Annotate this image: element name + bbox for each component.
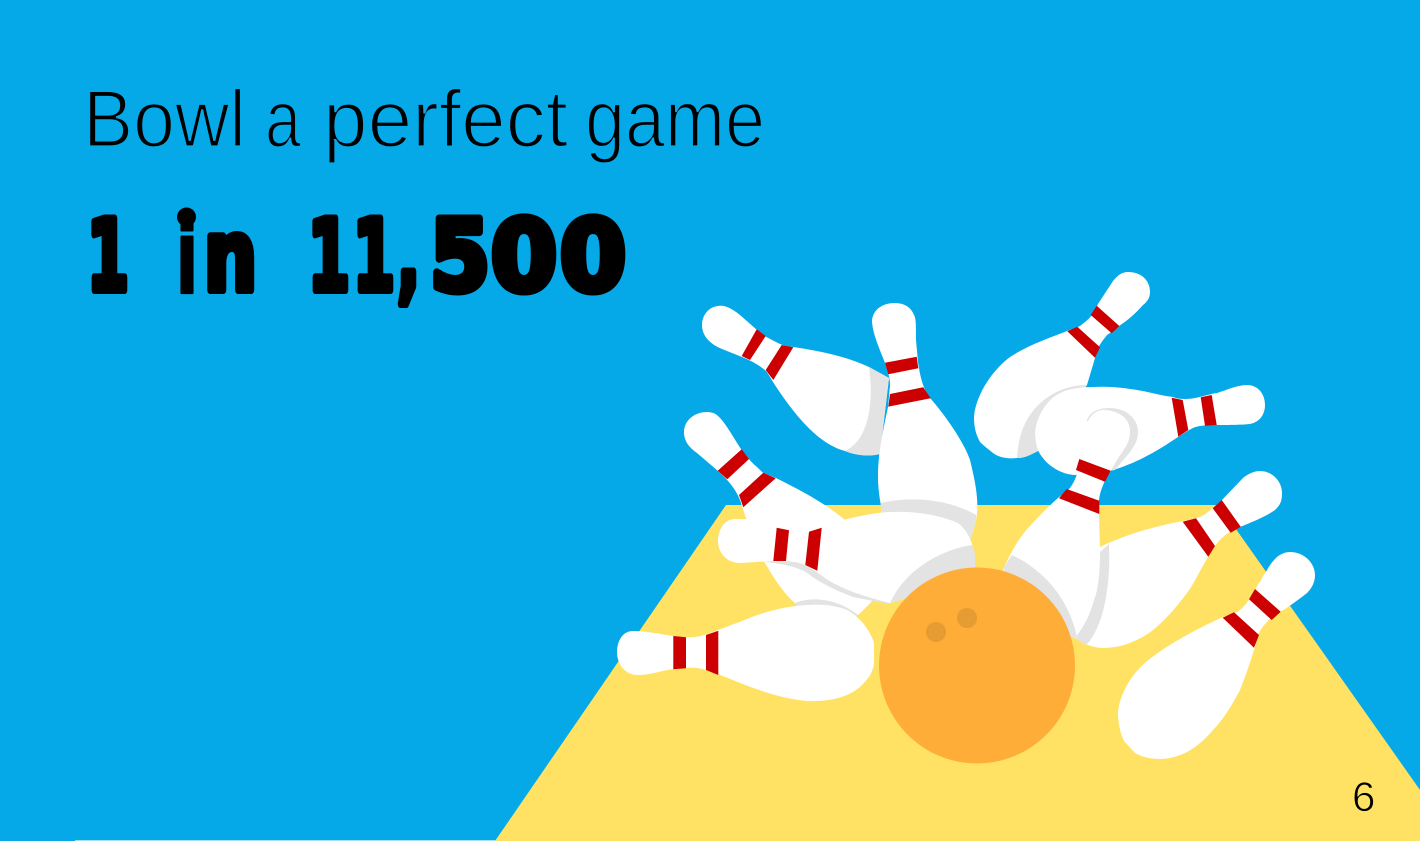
odds figure: ,	[397, 200, 420, 314]
bowling ball	[879, 568, 1075, 764]
odds figure: n	[204, 200, 257, 314]
pin: upper right, horizontal	[1035, 385, 1265, 475]
title: game	[585, 74, 765, 164]
bowling lane	[495, 505, 1420, 841]
pin: bottom left, lying flat	[617, 605, 874, 701]
page number: 6	[1352, 773, 1375, 820]
odds figure: 1	[87, 200, 129, 314]
title: Bowl	[83, 74, 246, 164]
pin: top left, knocked over	[702, 306, 889, 455]
odds figure: 0	[560, 200, 626, 314]
pin: middle left, behind horizontal pin	[684, 412, 890, 622]
odds figure: 1	[353, 200, 395, 314]
title: a	[265, 74, 302, 164]
odds figure: i	[176, 199, 198, 318]
odds figure: 5	[430, 200, 490, 314]
pin: centre right, head up	[1000, 410, 1130, 640]
odds figure	[87, 199, 626, 318]
pin: top right, tilted	[974, 272, 1150, 458]
title	[83, 74, 765, 164]
pin: lower right	[1118, 552, 1315, 759]
pin: centre upright	[872, 303, 977, 560]
odds figure: 0	[491, 200, 557, 314]
pin: right, tilted on lane	[1075, 471, 1282, 648]
pin: horizontal, centre	[718, 512, 975, 603]
title: perfect	[323, 74, 568, 164]
odds figure: 1	[308, 200, 350, 314]
